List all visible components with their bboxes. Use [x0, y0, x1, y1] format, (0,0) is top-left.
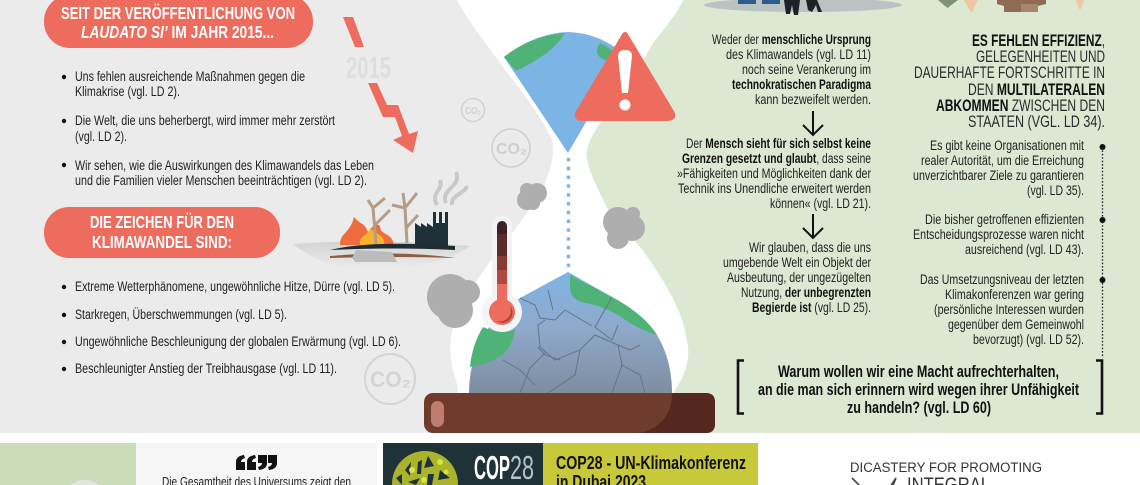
heading pill: seit der Veroeffentlichung: LAUDATO SI’ IM JAHR 2015...	[81, 22, 274, 42]
text block: Mensch ohne Grenzen: Grenzen gesetzt und glaubt, dass seine	[682, 151, 871, 166]
heading pill: seit der Veroeffentlichung	[44, 0, 313, 48]
text block: Ursprung des Klimawandels: des Klimawandels (vgl. LD 11)	[726, 47, 871, 62]
bullet list: since 2015: und die Familien vieler Menschen beeinträchtigen (vgl. LD 2).	[75, 173, 367, 188]
icon: small CO2: CO₂	[465, 106, 481, 117]
bullet list: signs of climate change: Extreme Wetterphänomene, ungewöhnliche Hitze, Dürre (vgl. LD 5).	[75, 279, 395, 294]
bullet list: since 2015: (vgl. LD 2).	[75, 129, 127, 144]
illustration: buildings and people on ellipse	[704, 0, 902, 15]
bullet list: signs of climate change: Ungewöhnliche Beschleunigung der globalen Erwärmung (vgl. LD 6).	[75, 334, 401, 349]
heading pill: Zeichen: KLIMAWANDEL SIND:	[92, 232, 232, 252]
bullet list: signs of climate change: Starkregen, Überschwemmungen (vgl. LD 5).	[75, 307, 287, 322]
text block: Klimakonferenzen: gegenüber dem Gemeinwohl	[948, 317, 1084, 332]
text block: keine Organisationen: unverzichtbarer Ziele zu garantieren	[913, 168, 1084, 183]
bullet list: since 2015: Wir sehen, wie die Auswirkungen des Klimawandels das Leben	[75, 158, 374, 173]
text block: Klimakonferenzen: Das Umsetzungsniveau der letzten	[920, 272, 1084, 287]
bullet list: since 2015: Klimakrise (vgl. LD 2).	[75, 84, 180, 99]
text block: Entscheidungsprozesse: ausreichend (vgl. LD 43).	[965, 242, 1084, 257]
heading: es fehlen Effizienz: DEN MULTILATERALEN	[968, 81, 1105, 99]
bullet list: since 2015	[62, 69, 374, 188]
illustration: smoke clouds	[427, 183, 645, 328]
text block: Mensch ohne Grenzen: Technik ins Unendliche erweitert werden	[678, 181, 871, 196]
panel: grey left background	[0, 0, 570, 433]
hourglass silhouette	[450, 0, 688, 433]
heading: es fehlen Effizienz	[914, 32, 1105, 131]
panel: quote box	[136, 443, 377, 485]
heading pill: seit der Veroeffentlichung: SEIT DER VERÖFFENTLICHUNG VON	[61, 3, 295, 23]
logo: dicastery	[851, 462, 1042, 485]
text block: Mensch ohne Grenzen: Der Mensch sieht für sich selbst keine	[686, 136, 871, 151]
panel: COP28 logo: COP	[474, 449, 510, 485]
text block: Ursprung des Klimawandels: kann bezweifelt werden.	[755, 92, 871, 107]
text block: Entscheidungsprozesse	[913, 212, 1084, 257]
panel: COP28 logo: 28	[510, 449, 534, 485]
text block: Entscheidungsprozesse: Entscheidungsprozesse waren nicht	[913, 227, 1084, 242]
heading: es fehlen Effizienz: ABKOMMEN ZWISCHEN DEN	[936, 97, 1105, 115]
illustration: figures and box	[938, 0, 1084, 13]
arrow: falling trend with 2015: 2015	[346, 50, 391, 85]
text block: Welt als Objekt der Ausbeutung: Wir glauben, dass die uns	[749, 240, 871, 255]
text block: Entscheidungsprozesse: Die bisher getroffenen effizienten	[925, 212, 1084, 227]
illustration: burning landscape and factory	[293, 172, 470, 269]
icon: thermometer	[482, 216, 522, 332]
callout: bracketed question: Warum wollen wir eine Macht aufrechterhalten,	[778, 363, 1059, 381]
bullet list: signs of climate change	[62, 279, 401, 376]
icon: medium CO2	[492, 129, 530, 167]
icon: large CO2	[365, 354, 415, 404]
panel: COP28 logo	[383, 443, 543, 485]
text block: Klimakonferenzen	[920, 272, 1084, 347]
bullet list: signs of climate change: Beschleunigter Anstieg der Treibhausgase (vgl. LD 11).	[75, 361, 337, 376]
dotted timeline	[1100, 144, 1106, 358]
panel: green right background	[570, 0, 1140, 433]
text block: Mensch ohne Grenzen: können« (vgl. LD 21).	[770, 196, 871, 211]
logo: dicastery: DICASTERY FOR PROMOTING	[850, 460, 1042, 475]
text block: Ursprung des Klimawandels: noch seine Verankerung im	[742, 62, 871, 77]
text block: keine Organisationen	[913, 138, 1084, 198]
text block: Klimakonferenzen: Klimakonferenzen war gering	[945, 287, 1084, 302]
hourglass base	[424, 393, 715, 433]
icon: warning triangle	[578, 35, 672, 118]
illustration: cracked lower globe	[469, 272, 672, 393]
icon: small CO2	[462, 98, 484, 122]
icon: large CO2: CO₂	[370, 367, 411, 392]
text block: Ursprung des Klimawandels	[712, 32, 871, 107]
text block: Klimakonferenzen: (persönliche Interessen wurden	[934, 302, 1084, 317]
callout: bracketed question: zu handeln? (vgl. LD 60)	[847, 399, 991, 417]
heading pill: Zeichen	[44, 207, 280, 258]
dotted falling sand line	[567, 158, 570, 272]
arrow: falling trend with 2015	[343, 17, 418, 153]
text block: Mensch ohne Grenzen	[677, 136, 871, 211]
panel: COP28 heading	[543, 443, 758, 485]
callout: bracketed question	[738, 360, 1102, 417]
text block: keine Organisationen: Es gibt keine Organisationen mit	[930, 138, 1084, 153]
illustration: upper globe in hourglass	[504, 32, 625, 153]
icon: medium CO2: CO₂	[496, 141, 527, 158]
text block: keine Organisationen: realer Autorität, um die Erreichung	[921, 153, 1084, 168]
text block: Welt als Objekt der Ausbeutung: Begierde ist (vgl. LD 25).	[752, 300, 871, 315]
bullet list: since 2015: Die Welt, die uns beherbergt, wird immer mehr zerstört	[75, 113, 335, 128]
arrow: down 1	[803, 111, 823, 135]
panel: green portrait box	[0, 443, 136, 485]
heading pill: Zeichen: DIE ZEICHEN FÜR DEN	[90, 212, 234, 232]
text block: Welt als Objekt der Ausbeutung: umgebende Welt ein Objekt der	[723, 255, 871, 270]
arrow: down 2	[803, 214, 823, 238]
text block: Welt als Objekt der Ausbeutung: Nutzung, der unbegrenzten	[741, 285, 871, 300]
text block: keine Organisationen: (vgl. LD 35).	[1027, 183, 1084, 198]
panel: COP28 heading: COP28 - UN-Klimakonferenz	[556, 453, 746, 473]
text block: Ursprung des Klimawandels: Weder der menschliche Ursprung	[712, 32, 871, 47]
text block: Welt als Objekt der Ausbeutung: Ausbeutung, der ungezügelten	[727, 270, 871, 285]
text block: Mensch ohne Grenzen: »Fähigkeiten und Möglichkeiten dank der	[677, 166, 871, 181]
text block: Ursprung des Klimawandels: technokratischen Paradigma	[732, 77, 871, 92]
bullet list: since 2015: Uns fehlen ausreichende Maßnahmen gegen die	[75, 69, 305, 84]
text block: Klimakonferenzen: bevorzugt) (vgl. LD 52).	[973, 332, 1084, 347]
text block: Welt als Objekt der Ausbeutung	[723, 240, 871, 315]
